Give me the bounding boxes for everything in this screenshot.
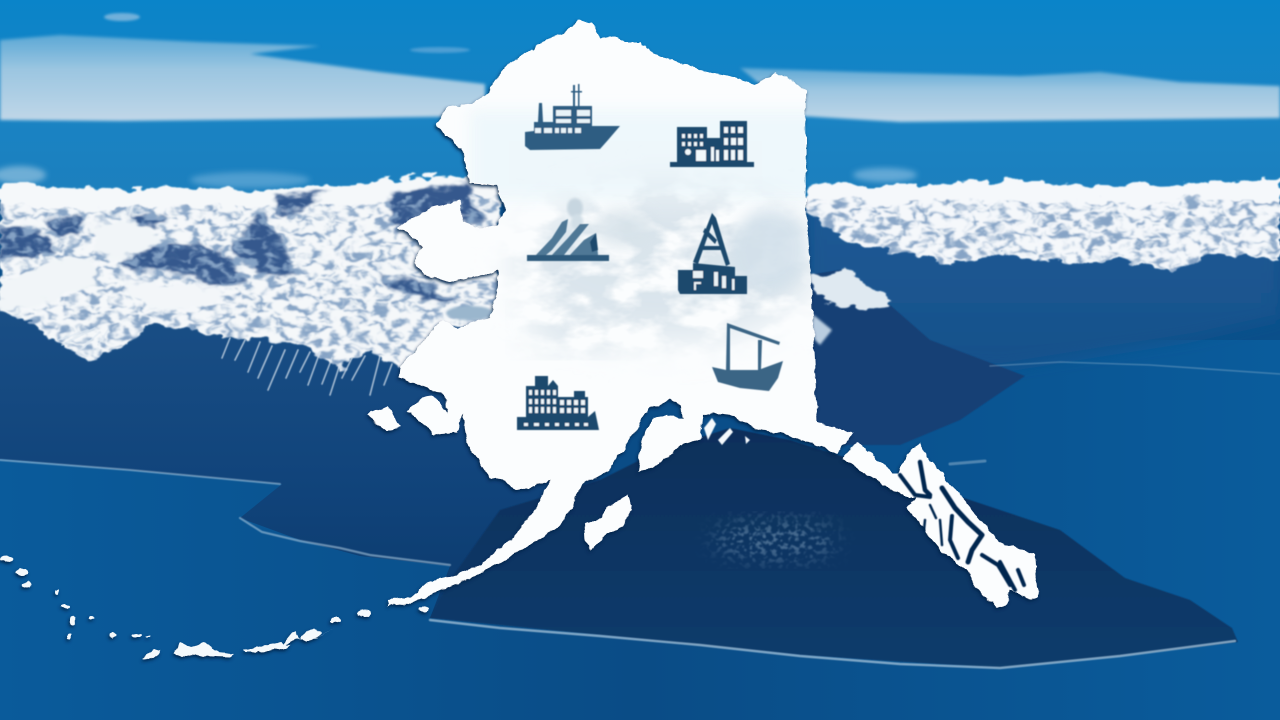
clouds [0,13,1280,188]
panhandle channels [900,462,1024,590]
island snow speckle [713,522,837,558]
Aleutian islands [1,557,428,660]
icon: fishing ship [525,84,620,150]
rock mottling [0,195,500,372]
faint mountain texture inside map [470,110,820,347]
right foreground hill with snowy peak [808,269,1025,445]
panhandle north strip [842,442,915,497]
island and coast foam lines [0,362,1280,668]
Prince William Sound speckle [704,418,750,445]
left dark mountain foot and shore [0,300,600,622]
panhandle south [898,443,1038,607]
snow streaks down the left slope [58,328,392,395]
icon: erupting volcano mountains [527,198,609,261]
far right mountain slope [808,200,1280,368]
left snowy mountain range [0,176,500,372]
icon: sailing boat [712,323,783,391]
icon: oil rig [678,213,747,294]
central foreground island [430,428,1238,668]
mainland Alaska [388,20,853,607]
Norton Sound pale ice [446,306,494,320]
sea [0,340,1280,720]
icon: factory buildings [670,121,754,167]
Kodiak island [584,494,632,550]
sky background [0,0,1280,200]
map of Alaska [1,20,1038,660]
right snowy mountain range [808,178,1280,272]
dark rock patches [0,182,485,303]
icon: ship-shaped tower block [517,376,599,430]
Nunivak island [366,405,400,431]
snow bowl [122,280,224,310]
